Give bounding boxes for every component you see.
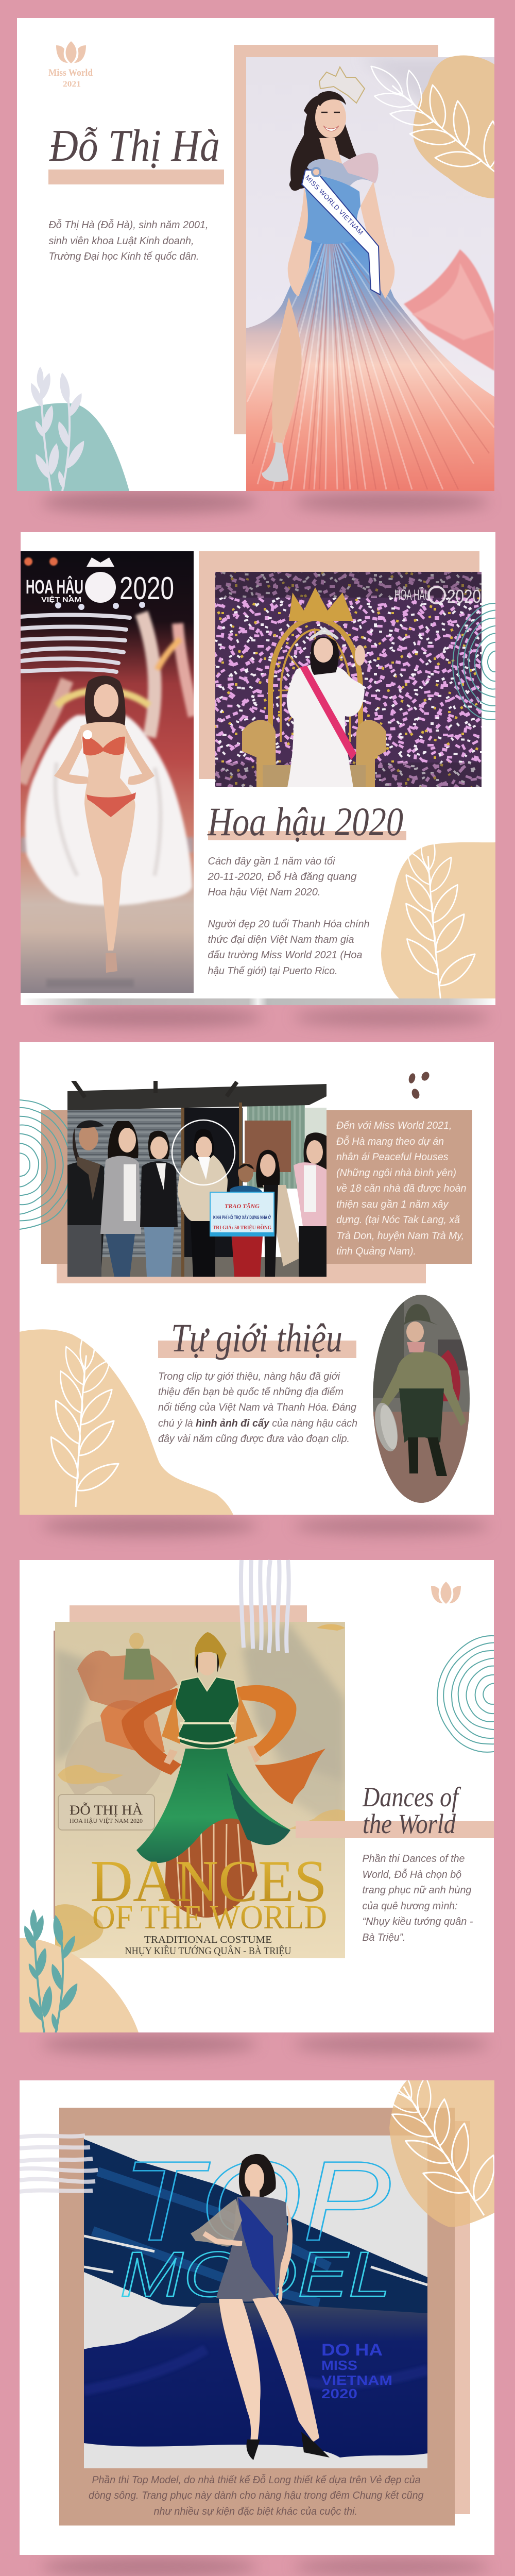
photo: rice planting oval	[371, 1295, 470, 1503]
person 3	[140, 1131, 178, 1277]
text: Peaceful Houses project: dựng. (tại Nóc Tak Lang, xã	[336, 1214, 460, 1226]
costume skirt	[165, 1816, 258, 1918]
panel: Đỗ Thị Hà profile	[17, 18, 515, 514]
caption in poster: DO HA: DO HA	[321, 2341, 383, 2359]
outline title: TOP MODEL: TOP	[122, 2138, 391, 2264]
dots decoration	[408, 1071, 431, 1100]
plate: Đỗ Thị Hà name	[58, 1794, 154, 1830]
text: costume story: trang phục nữ anh hùng	[363, 1885, 472, 1896]
sign: donation board: KINH PHÍ HỖ TRỢ XÂY DỰNG NHÀ Ở	[213, 1214, 271, 1220]
text: bio: Đỗ Thị Hà (Đỗ Hà), sinh năm 2001,	[48, 219, 208, 231]
blob with branch: top right decoration	[355, 2038, 515, 2235]
sash label: MISS WORLD VIETNAM	[304, 174, 365, 236]
heading: Đỗ Thị Hà: Đỗ Thị Hà	[49, 121, 220, 171]
sign: donation board	[210, 1192, 274, 1236]
brush lines	[20, 2136, 98, 2192]
text: costume story	[363, 1853, 473, 1943]
poster title	[90, 1849, 327, 1957]
text: intro clip: chú ý là hình ảnh đi cấy của nàng hậu cách	[158, 1418, 357, 1429]
photo: Peaceful Houses group	[67, 1078, 327, 1277]
poster title: TRADITIONAL COSTUME	[144, 1934, 272, 1945]
highlight circle	[172, 1120, 235, 1185]
text: Peaceful Houses project: Trà Don, huyện Nam Trà My,	[336, 1230, 464, 1242]
logo: Miss World 2021: 2021	[63, 80, 81, 89]
blob with branch: top right decoration	[370, 56, 494, 198]
poster: Dances of the World costume	[55, 1622, 345, 1958]
text: Top Model story: như nhiều sự kiện đặc biệt khác của cuộc thi.	[153, 2506, 357, 2517]
scarves	[122, 1688, 181, 1775]
plate: Đỗ Thị Hà name: HOA HẬU VIỆT NAM 2020	[70, 1817, 143, 1824]
person 4: Đỗ Hà	[178, 1129, 228, 1277]
photo logo: Hoa hậu 2020: 2020	[447, 586, 481, 607]
stage logo: HOA HẬU 2020: HOA HẬU	[26, 575, 83, 598]
bodice	[174, 1677, 239, 1749]
plate: Đỗ Thị Hà name: ĐỖ THỊ HÀ	[70, 1802, 143, 1818]
photo: Đỗ Thị Hà in gradient gown	[246, 57, 494, 491]
photo: stage walk with feather wings	[21, 551, 194, 993]
panel: Hoa hậu 2020	[21, 532, 495, 1033]
head and crown	[198, 1651, 216, 1675]
text: intro clip: nổi tiếng của Việt Nam và Thanh Hóa. Đáng	[158, 1402, 356, 1413]
poster: Top Model costume	[84, 2136, 427, 2468]
heading: Dances of the World	[296, 1782, 494, 1839]
brush lines	[21, 615, 130, 672]
person 1	[67, 1120, 104, 1277]
text: Peaceful Houses project: tỉnh Quảng Nam).	[336, 1246, 416, 1257]
blob with branch: top left decoration	[0, 2525, 93, 2576]
text: Top Model story: dòng sông. Trang phục này dành cho nàng hậu trong đêm Chung kết cũng	[89, 2490, 423, 2501]
figure: model	[191, 2154, 330, 2460]
poster title: NHỤY KIỀU TƯỚNG QUÂN - BÀ TRIỆU	[125, 1944, 291, 1957]
text: crowning story: Cách đây gần 1 năm vào tối	[208, 856, 335, 867]
caption in poster: DO HA: VIETNAM	[321, 2372, 392, 2388]
text: Top Model story: Phần thi Top Model, do nhà thiết kế Đỗ Long thiết kế dựa trên Vẻ đẹp của	[92, 2474, 420, 2486]
panel: Top Model	[20, 2038, 515, 2576]
lotus icon	[431, 1582, 461, 1604]
panel: Dances of the World	[20, 1560, 515, 2055]
caption in poster: DO HA: MISS	[321, 2358, 357, 2373]
rings decoration	[437, 1635, 494, 1753]
heading: Dances of the World: Dances of	[362, 1782, 461, 1812]
text: costume story: World, Đỗ Hà chọn bộ	[363, 1869, 461, 1880]
illustration: Bà Triệu on elephant	[65, 1633, 178, 1803]
caption in poster: DO HA: 2020	[321, 2386, 357, 2401]
photo logo: Hoa hậu 2020: HOA HẬU	[394, 587, 431, 604]
photo: crowning on golden throne	[215, 572, 482, 787]
text: intro clip: đây vài năm cũng được đưa vào đoạn clip.	[158, 1433, 350, 1445]
heading: Dances of the World: the World	[363, 1808, 456, 1839]
sign: donation board: TRỊ GIÁ: 50 TRIỆU ĐỒNG	[213, 1224, 271, 1231]
text: crowning story: thức đại diện Việt Nam tham gia	[208, 934, 354, 945]
sign: donation board: TRAO TẶNG	[225, 1202, 260, 1210]
text: crowning story: đấu trường Miss World 2021 (Hoa	[208, 950, 363, 961]
text: bio	[48, 219, 208, 262]
text: costume story: “Nhụy kiều tướng quân -	[363, 1916, 473, 1927]
blob with branch: bottom right decoration	[381, 842, 495, 998]
text: Peaceful Houses project: về 18 căn nhà đã được hoàn	[336, 1183, 467, 1194]
outline title: TOP MODEL: MODEL	[120, 2239, 391, 2310]
blob with branch: bottom left decoration	[20, 1322, 233, 1515]
person 6	[256, 1150, 302, 1277]
text: costume story: của quê hương mình:	[363, 1901, 457, 1912]
text: bio: Trường Đại học Kinh tế quốc dân.	[48, 251, 199, 262]
text: crowning story	[207, 856, 370, 977]
text: intro clip	[158, 1371, 357, 1445]
text: intro clip: thiệu đến bạn bè quốc tế những địa điểm	[158, 1386, 344, 1398]
text: costume story: Phần thi Dances of the	[363, 1853, 465, 1865]
heading: Tự giới thiệu: Tự giới thiệu	[171, 1315, 342, 1360]
blob with plant: bottom left decoration	[20, 1909, 139, 2033]
text: Peaceful Houses project: nhân ái Peaceful Houses	[336, 1151, 448, 1163]
heading: Hoa hậu 2020: Hoa hậu 2020	[207, 799, 403, 844]
text: crowning story: Hoa hậu Việt Nam 2020.	[208, 887, 320, 898]
logo: Miss World 2021: Miss World	[48, 67, 93, 78]
poster title: OF THE WORLD	[92, 1899, 327, 1936]
text: crowning story: 20-11-2020, Đỗ Hà đăng quang	[207, 871, 356, 883]
text: costume story: Bà Triệu”.	[363, 1932, 406, 1943]
stage logo: HOA HẬU 2020: VIỆT NAM	[41, 596, 81, 603]
text: crowning story: Người đẹp 20 tuổi Thanh Hóa chính	[208, 919, 370, 930]
logo: Miss World 2021	[48, 41, 93, 89]
person 5	[230, 1163, 263, 1277]
person 7	[294, 1132, 327, 1277]
stage logo: HOA HẬU 2020	[26, 557, 174, 606]
poster title: DANCES	[90, 1849, 327, 1914]
text: intro clip: Trong clip tự giới thiệu, nàng hậu đã giới	[158, 1371, 340, 1382]
text: crowning story: hậu Thế giới) tại Puerto Rico.	[208, 965, 338, 977]
text: Top Model story	[89, 2474, 423, 2517]
panel: Tự giới thiệu	[0, 1042, 494, 1536]
brush lines	[241, 1560, 289, 1653]
text: Peaceful Houses project: Đến với Miss World 2021,	[336, 1120, 452, 1131]
text: Peaceful Houses project: Đỗ Hà mang theo dự án	[336, 1136, 444, 1147]
blob with plant: bottom left decoration	[17, 367, 129, 491]
stage logo: HOA HẬU 2020: 2020	[119, 571, 174, 606]
outline title: TOP MODEL	[120, 2138, 391, 2310]
text: Peaceful Houses project: (Những ngôi nhà bình yên)	[336, 1167, 456, 1179]
text: Peaceful Houses project	[336, 1120, 467, 1257]
rings decoration	[20, 1099, 67, 1230]
caption in poster: DO HA	[321, 2341, 392, 2401]
text: Peaceful Houses project: thiện sau gần 1 năm xây	[336, 1199, 449, 1210]
text: bio: sinh viên khoa Luật Kinh doanh,	[48, 235, 194, 247]
person 2	[100, 1121, 141, 1277]
rings decoration	[452, 603, 495, 720]
panel: Miss World 2021	[0, 2525, 498, 2576]
